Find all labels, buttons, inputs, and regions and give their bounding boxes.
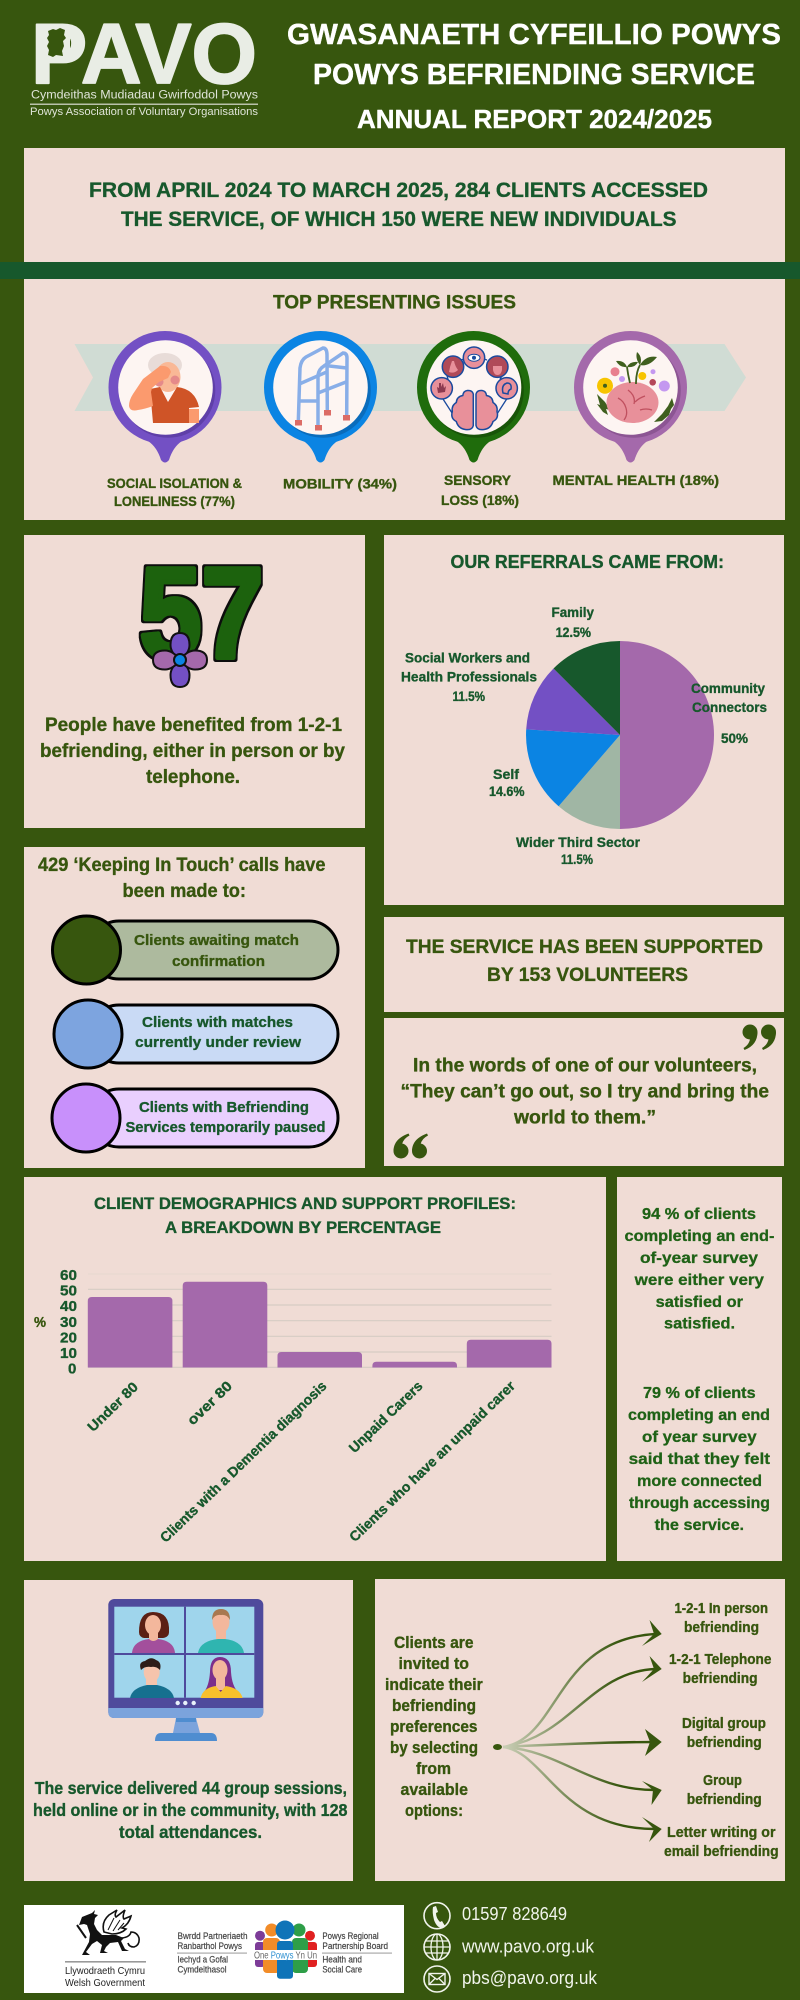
logo: Welsh Government — [65, 1910, 146, 1989]
arrows: options — [493, 1620, 662, 1842]
text: phone number: 01597 828649 — [462, 1904, 567, 1924]
text: preferences intro: by selecting — [390, 1739, 478, 1757]
heading: demographics — [94, 1194, 516, 1237]
bar chart: 40 — [60, 1298, 77, 1315]
panel: volunteers — [384, 917, 784, 1012]
pie labels: 11.5% — [561, 851, 593, 867]
icon: mail — [424, 1966, 450, 1992]
text: website: www.pavo.org.uk — [461, 1937, 595, 1957]
panel: headline statistic: FROM APRIL 2024 TO MARCH 2025, 284 CLIENTS ACCESSED — [89, 178, 708, 202]
text: 94% satisfied: were either very — [634, 1272, 764, 1289]
title: POWYS BEFRIENDING SERVICE — [313, 59, 755, 91]
text: 79% more connected: 79 % of clients — [643, 1385, 756, 1402]
icon: phone — [424, 1903, 450, 1929]
icon: mobility pin — [264, 331, 377, 462]
pie labels: Health Professionals — [401, 669, 537, 685]
text: 79% more connected: through accessing — [629, 1495, 770, 1512]
text: 79% more connected: the service. — [655, 1517, 744, 1534]
text: 94% satisfied: completing an end- — [624, 1228, 774, 1245]
panel: headline statistic: THE SERVICE, OF WHICH 150 WERE NEW INDIVIDUALS — [121, 207, 676, 231]
pill: under review: currently under review — [135, 1035, 302, 1051]
icon: flower — [153, 633, 207, 687]
bar chart: over 80 — [184, 1377, 235, 1428]
pill: temporarily paused: Services temporarily paused — [126, 1120, 326, 1136]
panel: client demographics — [24, 1177, 606, 1561]
bar chart: Clients who have an unpaid carer — [346, 1377, 518, 1545]
contact details — [424, 1903, 598, 1992]
option labels: email befriending — [664, 1843, 779, 1860]
text: preferences intro — [385, 1634, 483, 1820]
pie labels: Community — [691, 680, 765, 696]
label: sensory loss — [441, 472, 519, 508]
logo: Regional Partnership Board text, English: Social Care — [322, 1965, 362, 1975]
icon: globe — [424, 1934, 450, 1960]
pill: temporarily paused: Clients with Befriending — [139, 1100, 309, 1116]
text: 1-2-1 befriending: People have benefited from 1-2-1 — [45, 715, 342, 736]
bar chart: 0 — [68, 1360, 76, 1378]
title — [287, 19, 781, 134]
logo: PAVO: Cymdeithas Mudiadau Gwirfoddol Powys — [31, 90, 258, 102]
person 1 — [132, 1612, 175, 1653]
text: 79% more connected: more connected — [637, 1473, 762, 1490]
text: preferences intro: indicate their — [385, 1676, 483, 1694]
logo: PAVO: PAVO — [31, 7, 257, 102]
text: 79% more connected — [628, 1385, 771, 1534]
panel: befriending preferences — [375, 1579, 785, 1881]
bar chart: 60 — [60, 1267, 77, 1284]
panel: referrals — [384, 535, 784, 905]
label: sensory loss: LOSS (18%) — [441, 492, 519, 508]
title: ANNUAL REPORT 2024/2025 — [357, 104, 712, 134]
text: email: pbs@pavo.org.uk — [462, 1968, 598, 1988]
person 2 — [198, 1609, 244, 1653]
text: preferences intro: available — [400, 1781, 468, 1799]
icon: closing quote mark — [742, 1024, 776, 1050]
logo: Regional Partnership Board text, English — [322, 1931, 392, 1975]
logo: Regional Partnership Board text, Welsh: Iechyd a Gofal — [178, 1955, 228, 1965]
bar chart — [34, 1267, 552, 1545]
text: preferences intro: options: — [405, 1802, 463, 1820]
logo: Regional Partnership Board text, Welsh: Bwrdd Partneriaeth — [178, 1931, 248, 1941]
text: 94% satisfied: satisfied. — [664, 1316, 735, 1333]
icon: opening quote mark — [394, 1134, 428, 1158]
logo: Regional Partnership Board text, English: Powys Regional — [322, 1931, 379, 1941]
option labels: befriending — [687, 1791, 762, 1808]
panel: volunteers: THE SERVICE HAS BEEN SUPPORTED — [406, 936, 763, 958]
pie labels: 50% — [721, 730, 749, 746]
pie labels: 14.6% — [489, 783, 525, 799]
pie labels: Social Workers and — [405, 650, 530, 666]
pill: under review — [54, 1000, 338, 1068]
bar chart: % — [34, 1314, 46, 1331]
bar chart: 10 — [60, 1345, 77, 1362]
option labels: 1-2-1 Telephone — [669, 1651, 771, 1668]
label: social isolation: SOCIAL ISOLATION & — [107, 475, 242, 491]
text: group sessions — [33, 1778, 348, 1842]
heading: demographics: A BREAKDOWN BY PERCENTAGE — [165, 1218, 441, 1237]
person 3 — [130, 1658, 174, 1698]
logo: One Powys Yn Un: One Powys Yn Un — [254, 1950, 317, 1961]
text: 94% satisfied: of-year survey — [640, 1250, 758, 1267]
text: preferences intro: befriending — [392, 1697, 476, 1715]
label: mobility: MOBILITY (34%) — [283, 476, 397, 492]
text: preferences intro: Clients are — [394, 1634, 474, 1652]
panel: headline statistic — [24, 148, 785, 262]
bar chart: Clients with a Dementia diagnosis — [157, 1378, 330, 1545]
text: 79% more connected: completing an end — [628, 1407, 770, 1424]
option labels — [664, 1600, 779, 1860]
icon: video call monitor — [108, 1599, 263, 1741]
heading: top presenting issues: TOP PRESENTING ISSUES — [273, 293, 516, 314]
divider band — [0, 262, 800, 279]
text: 1-2-1 befriending: befriending, either in person or by — [40, 741, 345, 762]
text: 94% satisfied: satisfied or — [656, 1294, 743, 1311]
big number 57: 57 — [140, 542, 264, 686]
logo: Regional Partnership Board text, Welsh — [177, 1931, 248, 1975]
icon: sensory loss pin — [417, 331, 530, 462]
icon: dragon — [77, 1910, 139, 1955]
option labels: befriending — [687, 1734, 762, 1751]
panel: keeping in touch — [24, 847, 365, 1168]
pie labels: Connectors — [692, 699, 767, 715]
bar chart: 30 — [60, 1314, 77, 1331]
text: preferences intro: from — [416, 1760, 451, 1778]
pie labels: 11.5% — [452, 688, 485, 704]
quote text: “They can’t go out, so I try and bring the — [400, 1082, 769, 1102]
heading: referrals: OUR REFERRALS CAME FROM: — [450, 552, 724, 572]
logo: Regional Partnership Board text, English: Health and — [322, 1955, 362, 1965]
title: GWASANAETH CYFEILLIO POWYS — [287, 19, 781, 51]
pill: awaiting match — [52, 916, 338, 984]
logo: Regional Partnership Board text, English: Partnership Board — [322, 1941, 388, 1951]
option labels: 1-2-1 In person — [674, 1600, 768, 1617]
label: social isolation — [107, 475, 242, 509]
option labels: befriending — [683, 1670, 758, 1687]
text: 94% satisfied — [624, 1206, 774, 1333]
heading: keeping in touch calls — [38, 855, 326, 902]
label: sensory loss: SENSORY — [444, 472, 512, 488]
pie chart — [526, 641, 714, 829]
text: group sessions: The service delivered 44 group sessions, — [35, 1778, 347, 1798]
bar chart: 50 — [60, 1282, 77, 1300]
pie labels — [401, 604, 767, 867]
text: 1-2-1 befriending: telephone. — [146, 767, 240, 788]
icon: mental health pin — [574, 331, 687, 462]
footer: partner logos — [24, 1905, 404, 1993]
option labels: Group — [703, 1772, 742, 1789]
option labels: Digital group — [682, 1715, 766, 1732]
quote text: world to them.” — [513, 1108, 656, 1129]
panel: group sessions — [24, 1580, 353, 1881]
pill: under review: Clients with matches — [142, 1015, 293, 1031]
text: group sessions: held online or in the community, with 128 — [33, 1800, 348, 1820]
pie labels: Family — [552, 604, 594, 620]
logo: Regional Partnership Board text, Welsh: Ranbarthol Powys — [178, 1941, 242, 1951]
panel: 57 people — [24, 535, 365, 828]
panel: volunteers: BY 153 VOLUNTEERS — [487, 964, 688, 986]
pill: temporarily paused — [52, 1084, 338, 1152]
option labels: Letter writing or — [667, 1824, 776, 1841]
text: preferences intro: preferences — [390, 1718, 478, 1736]
panel: survey results — [617, 1177, 782, 1561]
text: preferences intro: invited to — [398, 1655, 469, 1673]
pie labels: Wider Third Sector — [516, 834, 641, 850]
logo: Welsh Government: Welsh Government — [65, 1977, 145, 1989]
quote text: In the words of one of our volunteers, — [413, 1055, 757, 1076]
logo: PAVO: Powys Association of Voluntary Organisations — [30, 106, 258, 118]
pie labels: 12.5% — [556, 624, 591, 640]
logo: One Powys Yn Un — [253, 1920, 318, 1979]
option labels: befriending — [684, 1619, 759, 1636]
logo: Regional Partnership Board text, Welsh: Cymdeithasol — [178, 1965, 226, 1975]
arrow ribbon — [74, 344, 746, 411]
logo: Welsh Government: Llywodraeth Cymru — [65, 1965, 145, 1977]
person 4 — [201, 1657, 243, 1698]
text: 79% more connected: of year survey — [642, 1429, 757, 1446]
panel: volunteer quote — [384, 1018, 784, 1166]
label: social isolation: LONELINESS (77%) — [114, 493, 235, 509]
pill: awaiting match: confirmation — [172, 954, 265, 970]
bar chart: Unpaid Carers — [345, 1378, 426, 1456]
heading: keeping in touch calls: been made to: — [122, 881, 246, 902]
panel: top presenting issues — [24, 279, 785, 520]
text: 79% more connected: said that they felt — [629, 1451, 771, 1468]
heading: demographics: CLIENT DEMOGRAPHICS AND SUPPORT PROFILES: — [94, 1194, 516, 1213]
bar chart: 20 — [60, 1330, 77, 1346]
text: group sessions: total attendances. — [119, 1822, 262, 1842]
text: 1-2-1 befriending — [40, 715, 345, 788]
label: mental health: MENTAL HEALTH (18%) — [552, 472, 719, 488]
text: 94% satisfied: 94 % of clients — [642, 1206, 756, 1223]
bar chart: Under 80 — [84, 1378, 141, 1435]
pie labels: Self — [493, 766, 519, 782]
pill: awaiting match: Clients awaiting match — [134, 933, 299, 949]
heading: keeping in touch calls: 429 ‘Keeping In Touch’ calls have — [38, 855, 326, 876]
quote text — [400, 1055, 769, 1129]
icon: social isolation pin — [108, 331, 222, 462]
